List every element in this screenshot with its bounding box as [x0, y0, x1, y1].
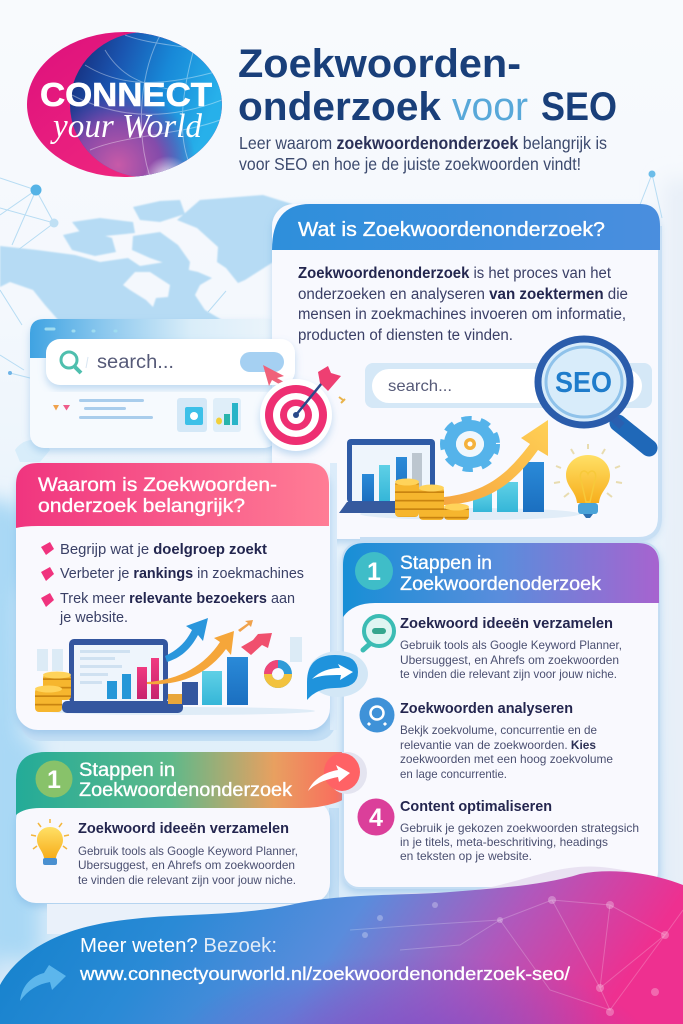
search bar illustration: search... [388, 378, 452, 395]
step 1: Ubersuggest, en Ahrefs om zoekwoorden [400, 653, 619, 667]
step 3: in je titels, meta-beschritiving, headings [400, 835, 608, 849]
step number badge [355, 552, 393, 590]
search bar on left card: search... [97, 352, 174, 373]
header text [400, 553, 602, 595]
icon: coins [395, 478, 469, 520]
left illustration card [30, 319, 278, 448]
title: onderzoek [238, 85, 442, 129]
icon: bar chart laptop [339, 439, 435, 513]
subtitle: Leer waarom zoekwoordenonderzoek belangrijk is [239, 133, 607, 153]
logo wordmark [40, 76, 212, 145]
arrow: small orange [238, 620, 253, 632]
footer heading: Meer weten? Bezoek: [80, 935, 277, 957]
step 1: Gebruik tools als Google Keyword Planner, [400, 638, 622, 652]
panel frames behind left column [20, 700, 339, 908]
panel header [272, 204, 660, 250]
icon: pink cursor arrow [263, 365, 284, 386]
footer wave [0, 866, 683, 1024]
bullet list: je website. [59, 609, 128, 626]
step 3: Gebruik je gekozen zoekwoorden strategsich [400, 821, 639, 835]
step 3: Content optimaliseren [400, 798, 552, 815]
logo wordmark: your World [50, 108, 203, 145]
arrow: blue [165, 618, 208, 662]
panel heading [38, 474, 277, 517]
icon: gear [443, 419, 497, 469]
panel heading: onderzoek belangrijk? [38, 495, 245, 517]
step 1 [363, 615, 622, 681]
bar chart [473, 462, 544, 512]
step title: Zoekwoord ideeën verzamelen [78, 820, 289, 837]
step number badge: 1 [47, 766, 61, 794]
step text [78, 844, 298, 887]
search bar on left card [46, 339, 295, 386]
subtitle [239, 133, 607, 174]
panel: wat is zoekwoordenonderzoek [272, 204, 660, 730]
illustration: laptop with growth chart [35, 618, 315, 715]
connector badge: red arrow [310, 752, 367, 794]
step text: Ubersuggest, en Ahrefs om zoekwoorden [78, 858, 295, 872]
panel heading: Wat is Zoekwoordenonderzoek? [298, 219, 605, 241]
icon: blue search [360, 698, 394, 732]
search bar illustration [365, 363, 652, 408]
world map [0, 195, 292, 322]
panel gutter [330, 463, 337, 730]
step number badge [36, 760, 72, 798]
panel: stappen in zoekwoordenonderzoek, left [16, 752, 360, 903]
title: SEO [541, 85, 617, 129]
arrow: footer [20, 965, 66, 1001]
step 2 [360, 698, 613, 781]
subtitle: voor SEO en hoe je de juiste zoekwoorden vindt! [239, 154, 581, 174]
panel body text: producten of diensten te vinden. [298, 327, 513, 344]
network decoration: top left and right nodes [0, 170, 662, 462]
step 3: en teksten op je website. [400, 849, 532, 863]
step text: Gebruik tools als Google Keyword Planner, [78, 844, 298, 858]
header text: Zoekwoordenonderzoek [79, 780, 293, 801]
logo wordmark: CONNECT [40, 76, 212, 113]
header text [79, 760, 293, 801]
arrow: growth [444, 420, 548, 505]
panel body text: Zoekwoordenonderzoek is het proces van het [298, 265, 612, 282]
arrow: white swoosh [308, 767, 345, 791]
title: Zoekwoorden- [238, 42, 521, 86]
icon: SEO magnifier: SEO [555, 367, 612, 399]
panel: stappen in zoekwoordenoderzoek, right [343, 543, 659, 888]
icon: SEO magnifier [538, 339, 649, 448]
step number badge: 1 [367, 558, 381, 586]
illustration base [360, 508, 580, 520]
icon: light bulb [554, 444, 622, 518]
logo: Connect your World [27, 32, 222, 177]
step 2: en lage concurrentie. [400, 767, 507, 781]
panel heading: Waarom is Zoekwoorden- [38, 474, 277, 496]
icon: number four [358, 798, 394, 836]
laptop [62, 639, 183, 713]
header text: Stappen in [79, 760, 175, 781]
header text: Zoekwoordenoderzoek [400, 574, 602, 595]
bullet list: Trek meer relevante bezoekers aan [60, 590, 295, 607]
step text: te vinden die relevant zijn voor jouw niche. [78, 873, 296, 887]
step 2: Zoekwoorden analyseren [400, 700, 573, 717]
title: voor [452, 85, 528, 129]
connector badge: blue arrow [307, 651, 368, 700]
header text: Stappen in [400, 553, 492, 574]
panel body text: mensen in zoekmachines invoeren om informatie, [298, 306, 626, 323]
bars [168, 657, 248, 705]
panel body text [298, 265, 628, 344]
step 2: zoekwoorden met een hoog zoekvolume [400, 752, 613, 766]
panel: waarom is zoekwoordenonderzoek belangrijk [16, 463, 330, 730]
step 2: relevantie van de zoekwoorden. Kies [400, 738, 596, 752]
coins [35, 672, 71, 712]
icon: donut chart [268, 664, 288, 684]
step 2: Bekjk zoekvolume, concurrentie en de [400, 723, 597, 737]
step 1: Zoekwoord ideeën verzamelen [400, 615, 613, 632]
bullet list: Begrijp wat je doelgroep zoekt [60, 541, 267, 558]
bullet list [41, 541, 304, 626]
step 1: te vinden die relevant zijn voor jouw niche. [400, 667, 617, 681]
footer url: www.connectyourworld.nl/zoekwoordenonderzoek-seo/ [79, 963, 571, 984]
icon: teal search [363, 616, 394, 650]
bottom pale strip [47, 904, 330, 934]
icon: target with arrow [260, 366, 345, 451]
bullet list: Verbeter je rankings in zoekmachines [60, 565, 304, 582]
panel body text: onderzoeken en analyseren van zoektermen die [298, 286, 628, 303]
arrow: red [241, 633, 272, 655]
step 3 [358, 798, 639, 863]
footer network pattern [350, 900, 683, 1010]
title [238, 42, 617, 129]
icon: number four: 4 [369, 804, 383, 832]
icon: teal magnifier [61, 352, 81, 373]
icon: light bulb [31, 819, 69, 865]
card mini content [53, 398, 241, 432]
arrow: orange [147, 631, 234, 684]
